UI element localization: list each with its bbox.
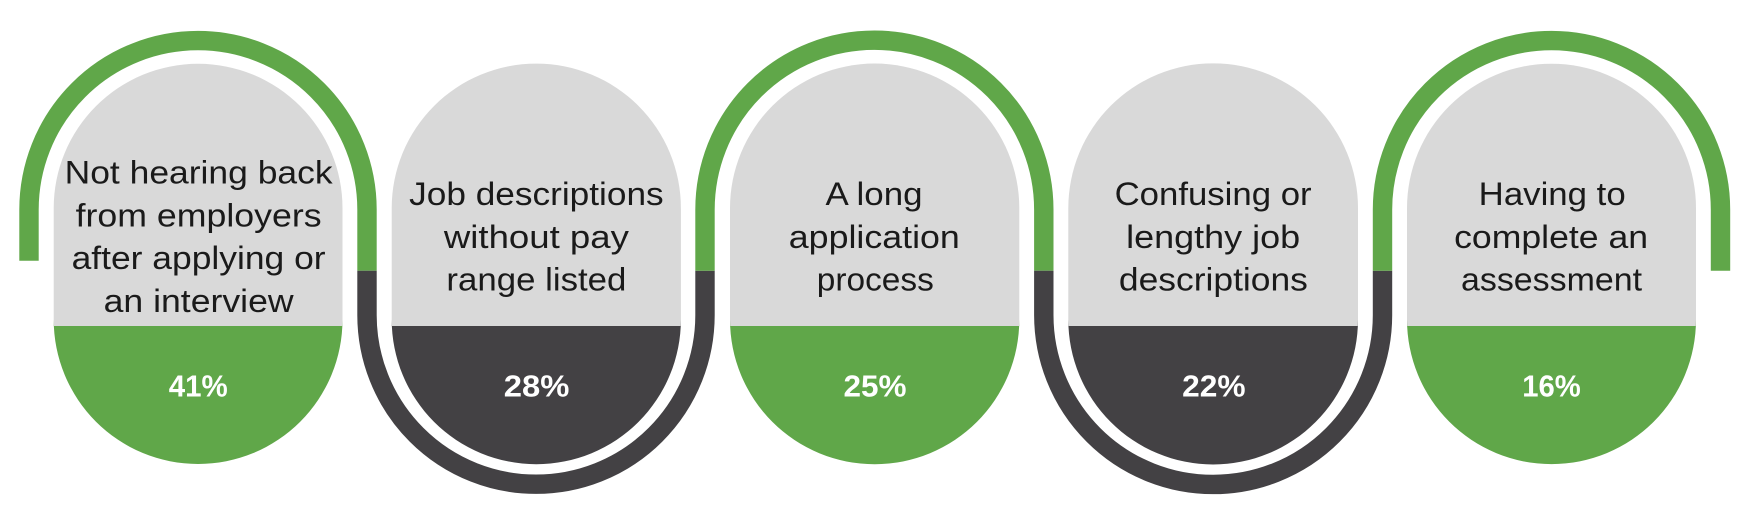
panel: long application process, 25%	[730, 64, 1019, 464]
panel: long application process, 25%: 25%	[844, 368, 906, 404]
connector: green arc over pill 1	[29, 41, 367, 271]
panel: job descriptions without pay, 28%: 28%	[504, 368, 569, 404]
panel: job descriptions without pay, 28%: without pay	[443, 219, 629, 255]
panel: not hearing back, 41%	[54, 64, 342, 464]
panel: job descriptions without pay, 28%	[392, 64, 681, 464]
panel: confusing job descriptions, 22%: descriptions	[1119, 262, 1308, 298]
connector: green arc over pill 3	[705, 40, 1044, 271]
panel: not hearing back, 41%: an interview	[104, 283, 295, 319]
panel: job descriptions without pay, 28%: range listed	[446, 262, 626, 298]
panel: having to complete assessment, 16%	[1407, 64, 1696, 464]
panel: not hearing back, 41%: from employers	[76, 197, 322, 233]
panel: long application process, 25%: A long	[826, 176, 922, 212]
panel: not hearing back, 41%: after applying or	[72, 240, 326, 276]
panel: confusing job descriptions, 22%: lengthy job	[1126, 219, 1300, 255]
panel: job descriptions without pay, 28%: Job descriptions	[409, 176, 664, 212]
panel: confusing job descriptions, 22%: 22%	[1182, 368, 1246, 404]
panel: having to complete assessment, 16%: Having to	[1479, 176, 1626, 212]
connector: dark arc under pill 2	[367, 271, 705, 484]
panel: long application process, 25%: application	[789, 219, 960, 255]
panel: long application process, 25%: process	[817, 262, 934, 298]
panel: confusing job descriptions, 22%	[1068, 63, 1358, 464]
panel: having to complete assessment, 16%: 16%	[1522, 368, 1581, 404]
connector: green arc over pill 5	[1382, 41, 1720, 271]
panel: having to complete assessment, 16%: complete an	[1454, 219, 1648, 255]
panel: confusing job descriptions, 22%: Confusing or	[1115, 176, 1312, 212]
connector: dark arc under pill 4	[1044, 271, 1382, 484]
panel: having to complete assessment, 16%: assessment	[1461, 262, 1642, 298]
panel: not hearing back, 41%: Not hearing back	[65, 154, 334, 190]
panel: not hearing back, 41%: 41%	[169, 368, 228, 404]
